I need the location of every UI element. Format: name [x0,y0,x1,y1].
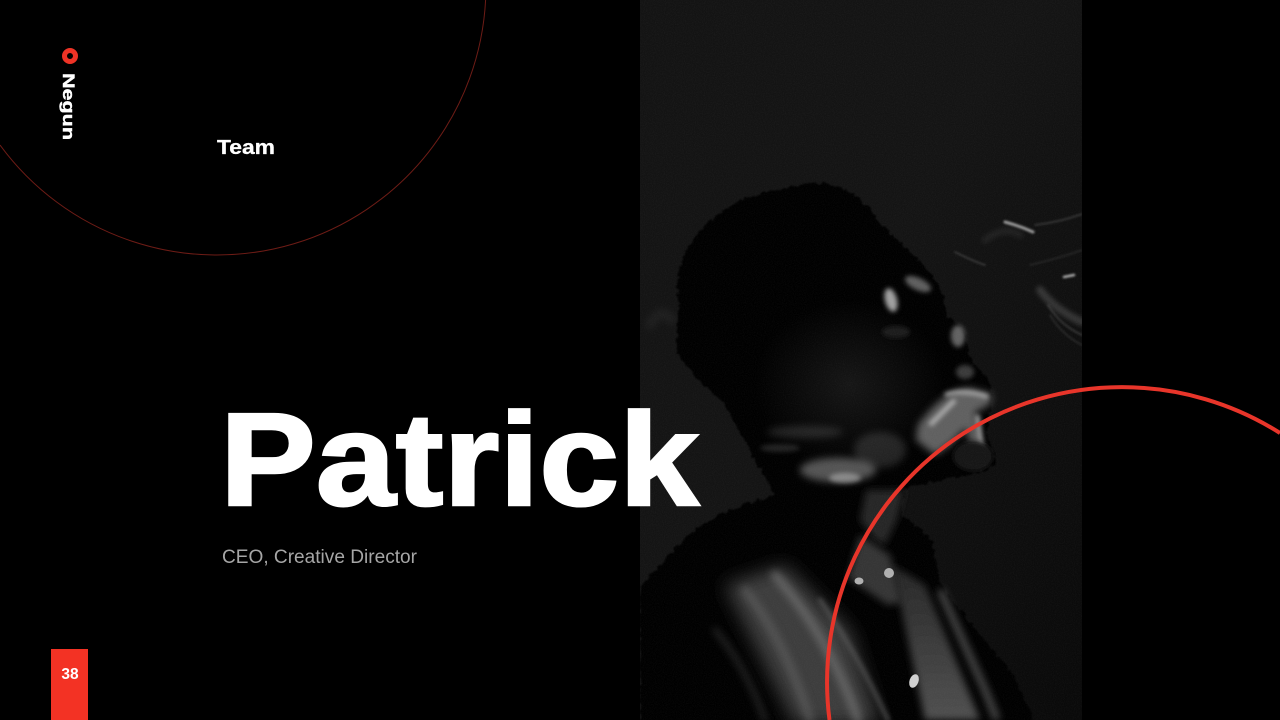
page number tab [51,649,88,720]
face tone [790,331,910,438]
subtitle: role: CEO, Creative Director [222,547,418,568]
brand logo: ring and vertical name [59,50,78,140]
photo grain [640,0,1082,720]
top-left thin circle outline [0,0,486,255]
large red circle outline [827,387,1280,720]
right shirt panel seam [940,590,997,720]
section label: Team [217,137,275,159]
silhouette: hair, face, shirt [640,183,1035,720]
smoke over the neck and beard [760,426,906,483]
smoke drifting on the right [650,214,1082,345]
title: name: Patrick [220,386,700,533]
forehead and cheek highlights [882,273,974,379]
collar [848,535,902,605]
brand name: Negun [59,73,78,140]
shirt light streaks [715,575,888,720]
photo: man exhaling smoke [640,0,1082,720]
shirt chest opening [892,565,980,720]
beard [953,441,993,471]
shirt light zone [725,565,880,720]
collar buttons [854,568,894,584]
neck [860,490,905,545]
photo wall backdrop [640,0,1082,720]
shirt and face highlights [715,273,997,720]
icon: red ring [64,50,76,62]
hand at the mouth [916,388,992,466]
page number tab: 38 [61,666,79,683]
shirt button [909,674,919,688]
